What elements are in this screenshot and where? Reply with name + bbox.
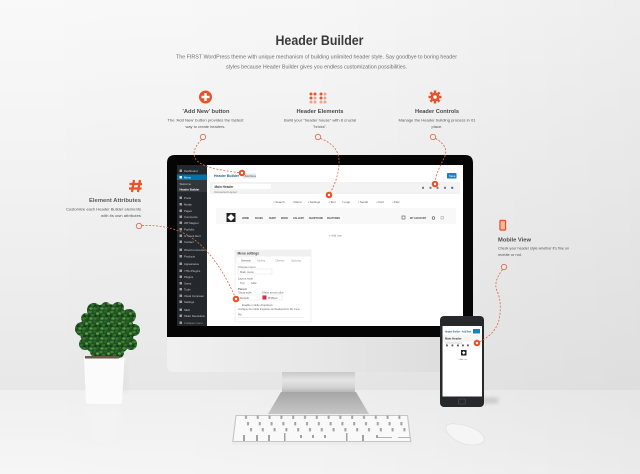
sidebar labels: Comments	[184, 215, 198, 219]
icon: plus circle	[199, 90, 212, 104]
connector: Header Controls	[430, 134, 446, 184]
description: Element Attributes: with its own attributes	[101, 214, 141, 218]
sidebar labels: Welcome	[180, 182, 192, 186]
phone toolbar	[442, 329, 482, 346]
heading: Add New button: 'Add New' button	[182, 109, 230, 115]
heading: Header Elements: Header Elements	[296, 109, 344, 115]
description: Add New button: The 'Add New' button provides the fastest	[168, 118, 245, 122]
sidebar labels: Tools	[184, 288, 191, 292]
preview nav: FEATURES	[327, 216, 340, 220]
phone toolbar: Connected layout	[445, 342, 462, 344]
phone screen	[442, 326, 482, 396]
description: Add New button: way to create headers.	[186, 125, 226, 129]
sidebar labels: Portfolio	[184, 228, 195, 232]
preview nav	[242, 216, 426, 220]
builder toolbar: Add New	[244, 174, 257, 178]
plant pot	[84, 358, 124, 404]
sidebar labels: SEO	[184, 308, 191, 312]
sidebar labels: Plugins	[184, 275, 194, 279]
menu settings panel: Choose menu	[238, 265, 256, 269]
sidebar labels: Settings	[184, 300, 195, 304]
heading: Element Attributes: Element Attributes	[89, 198, 141, 204]
menu settings panel: Side	[251, 281, 257, 285]
add row link: + Add row	[329, 234, 342, 238]
builder toolbar: Connected Layout	[214, 190, 237, 194]
sidebar labels: Appearance	[184, 262, 200, 266]
icon: gear	[428, 90, 442, 104]
element buttons	[274, 200, 400, 204]
builder toolbar: Header Builder	[214, 173, 239, 178]
sidebar labels: Users	[184, 282, 192, 286]
description: Mobile View	[498, 246, 569, 257]
menu settings panel: Spacing	[291, 258, 301, 262]
sidebar labels: Pages	[184, 209, 193, 213]
phone toolbar: Header Builder · Add New	[445, 330, 472, 334]
phone	[440, 316, 484, 407]
mouse	[446, 424, 484, 445]
phone shadow	[482, 398, 498, 403]
feature: Header Elements	[284, 92, 356, 129]
heading: Header Controls: Header Controls	[415, 109, 459, 115]
icon: phone	[500, 220, 506, 230]
menu settings panel: General	[241, 258, 251, 262]
sidebar labels	[180, 169, 205, 325]
element buttons: ▪ Menu	[292, 200, 302, 204]
builder toolbar: Save	[449, 174, 456, 178]
menu settings panel: #f45bcc	[268, 296, 278, 300]
phone toolbar: Main Header	[445, 336, 463, 340]
menu settings panel	[235, 250, 311, 322]
keyboard	[232, 415, 412, 445]
sidebar labels: Collapse menu	[184, 321, 203, 325]
key gaps	[240, 416, 410, 441]
description: Mobile View: Check your header style whether it's fine on	[498, 246, 569, 250]
sidebar labels: YITH Plugins	[184, 269, 201, 273]
phone home button	[458, 399, 466, 404]
menu settings panel: Top	[240, 281, 245, 285]
marker: Element Attributes	[233, 296, 239, 302]
sidebar labels: Products	[184, 255, 196, 259]
preview logo	[226, 213, 236, 222]
icon: hash	[129, 180, 142, 192]
description: Element Attributes: Customize each Header Builder elements	[66, 208, 141, 212]
element buttons: ▪ Cart	[376, 200, 384, 204]
monitor	[167, 155, 473, 414]
feature: Add New button	[168, 90, 245, 129]
menu settings panel: Styling	[257, 258, 266, 262]
element buttons: ▪ Search	[274, 200, 285, 204]
sidebar labels: Header Builder	[180, 188, 200, 192]
feature: Header Controls	[398, 90, 476, 129]
plant foliage	[75, 302, 140, 358]
description: Mobile View: mobile or not.	[498, 253, 522, 257]
description: Header Elements	[284, 118, 356, 129]
menu settings panel: Configure the mobile dropdown and breakpoint for this menu	[238, 308, 300, 311]
pot reflection	[88, 408, 120, 444]
feature: Element Attributes	[66, 180, 142, 218]
heading: Mobile View: Mobile View	[498, 238, 531, 244]
menu settings panel: Enable mobile dropdown	[242, 303, 273, 307]
marker: Header Elements	[326, 192, 332, 198]
connector: Add New	[194, 134, 241, 173]
marker: Mobile View	[474, 340, 480, 346]
description: Header Controls: Manage the Header building process in 01	[398, 118, 476, 122]
monitor chin	[167, 330, 473, 372]
potted plant	[75, 302, 140, 444]
preview nav: MY ACCOUNT	[410, 216, 426, 220]
monitor bezel	[167, 155, 473, 337]
intro text: styles because Header Builder gives you endless customization possibilities.	[226, 64, 407, 70]
pot shadow	[123, 364, 128, 392]
menu settings panel: Show style	[238, 290, 252, 294]
element buttons: ▪ Flex	[392, 200, 400, 204]
preview icons	[402, 216, 444, 219]
description: Header Controls	[398, 118, 476, 129]
wordpress sidebar	[177, 165, 207, 326]
phone logo	[461, 350, 466, 356]
menu settings panel: Rtl	[238, 312, 242, 316]
menu settings panel: Layout style	[238, 276, 253, 280]
preview nav: PAGES	[255, 216, 263, 220]
sidebar labels: Menu	[184, 175, 191, 179]
description: Header Elements: "bricks".	[313, 125, 327, 129]
table surface	[0, 390, 640, 474]
sidebar labels: WP Mapper	[184, 221, 199, 225]
element buttons: ▪ Logo	[342, 200, 351, 204]
screen	[207, 165, 463, 326]
menu settings panel: Main menu	[240, 270, 254, 274]
menu settings panel: Default	[240, 296, 249, 300]
marker: Add New	[239, 170, 245, 176]
sidebar labels: Posts	[184, 196, 192, 200]
element buttons: ▪ Settings	[308, 200, 321, 204]
menu settings panel: Parent	[238, 287, 247, 291]
menu settings panel: Classes	[275, 258, 285, 262]
description: Header Controls: place.	[432, 125, 442, 129]
preview nav: SHORTCODE	[309, 216, 323, 220]
menu settings panel: Menu settings	[238, 252, 259, 256]
description: Header Elements: Build your "header house" with 8 crucial	[284, 118, 356, 122]
marker: Header Controls	[432, 181, 438, 187]
sidebar labels: WooCommerce	[184, 248, 205, 252]
builder toolbar	[210, 173, 460, 194]
sidebar labels: Slider Revolution	[184, 314, 205, 318]
element buttons: ▪ Text	[328, 200, 336, 204]
description: Add New button	[168, 118, 245, 129]
sidebar labels: Contact	[184, 240, 194, 244]
intro text	[176, 54, 457, 70]
connector: Element Attributes	[136, 223, 236, 299]
menu settings panel: Show arrow color	[262, 290, 284, 294]
sidebar labels: Media	[184, 202, 192, 206]
builder toolbar: Main Header	[214, 185, 234, 189]
phone add row: + Add row	[458, 358, 468, 361]
sidebar labels: Dashboard	[184, 169, 198, 173]
preview nav: SHOP	[269, 216, 276, 220]
intro text: The FIRST WordPress theme with unique mechanism of building unlimited header style. Say goodbye to boring header	[176, 54, 457, 60]
soil	[85, 356, 119, 358]
connector: Header Elements	[315, 134, 339, 195]
preview nav: BOOK	[281, 216, 288, 220]
connector: Mobile View	[477, 264, 507, 343]
sidebar icons	[180, 170, 182, 324]
sidebar labels: In Stock Alert	[184, 234, 201, 238]
description: Element Attributes	[66, 208, 141, 218]
monitor stand	[268, 372, 369, 414]
element buttons: ▪ Social	[358, 200, 368, 204]
icon: dot grid	[310, 92, 326, 104]
feature: Mobile View	[498, 220, 569, 257]
preview nav: HOME	[242, 216, 249, 220]
title: Header Builder	[276, 33, 364, 48]
preview nav: GALLERY	[293, 216, 304, 220]
sidebar labels: Visual Composer	[184, 294, 204, 298]
header preview row	[216, 208, 456, 224]
